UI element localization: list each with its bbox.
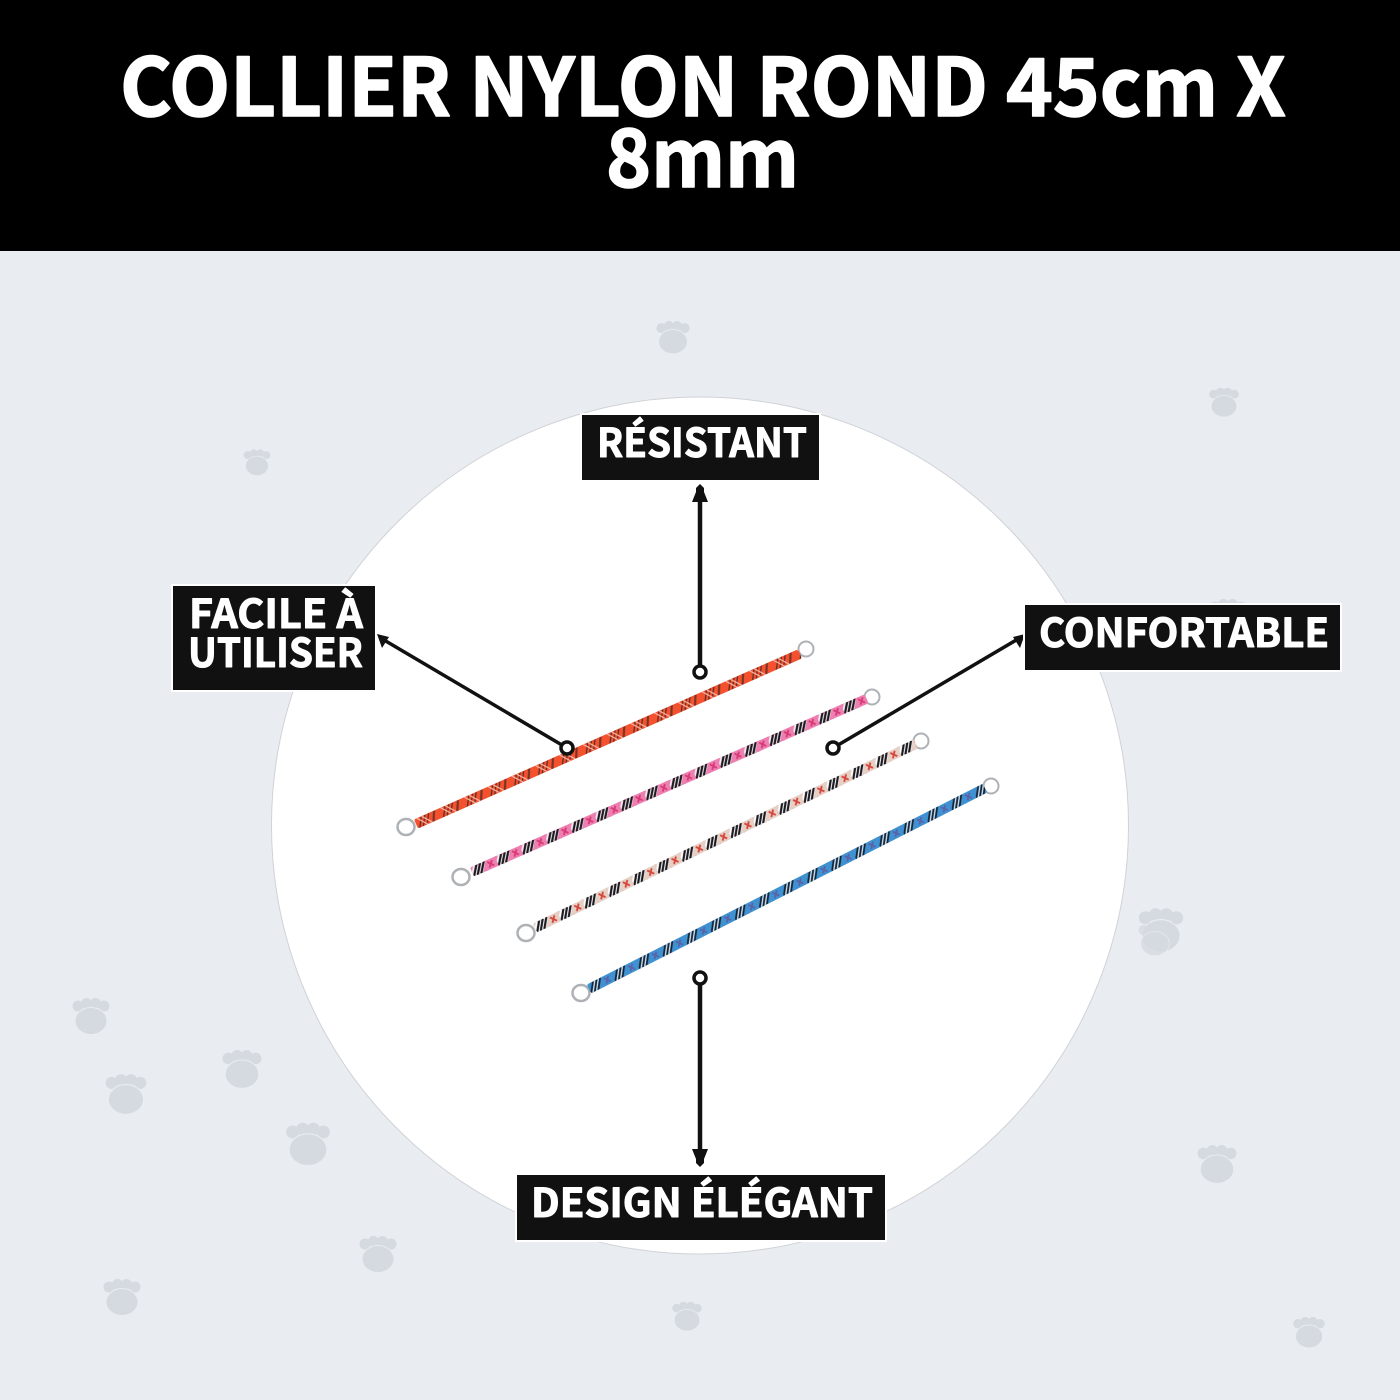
background paw prints (72, 321, 1325, 1348)
label: facile à utiliser (172, 582, 376, 691)
collar: pink (452, 690, 880, 885)
white circle panel (272, 397, 1128, 1254)
arrow: to confortable (827, 634, 1025, 754)
label: résistant: RÉSISTANT (597, 411, 807, 469)
arrow: down to design élégant (692, 972, 708, 1167)
title: 8mm (606, 95, 799, 211)
arrow: to facile à utiliser (377, 634, 573, 754)
label: design élégant: DESIGN ÉLÉGANT (531, 1171, 873, 1229)
collar: red (398, 642, 814, 835)
title (120, 24, 1286, 211)
title: COLLIER NYLON ROND 45cm X (120, 24, 1286, 140)
collar: beige (518, 734, 928, 941)
label: confortable: CONFORTABLE (1039, 601, 1329, 659)
label: facile à utiliser: FACILE À (189, 582, 363, 640)
label: facile à utiliser: UTILISER (188, 621, 363, 679)
header band (0, 0, 1400, 251)
arrow: up to résistant (692, 484, 708, 678)
collar: blue (572, 778, 998, 1001)
